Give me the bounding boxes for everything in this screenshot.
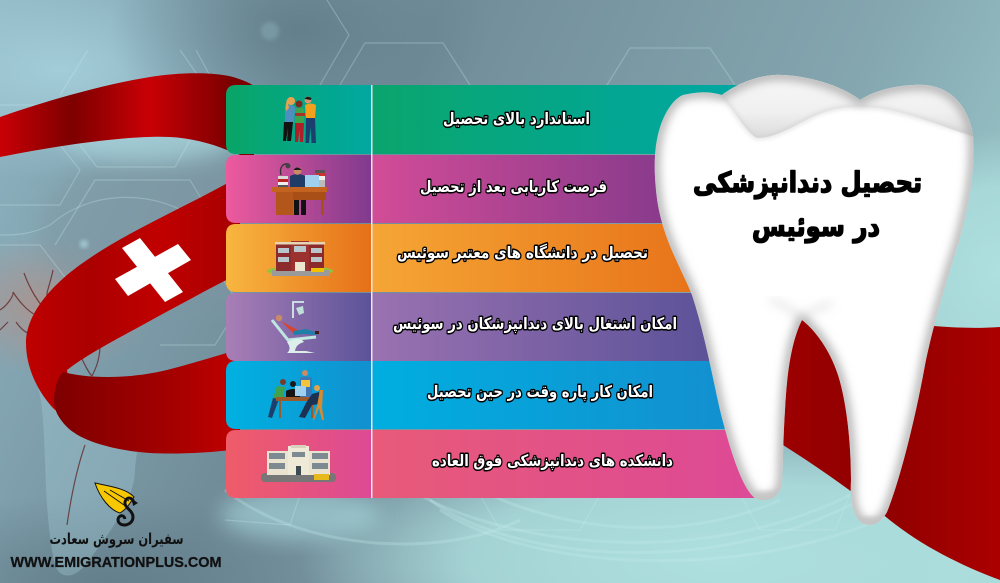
title <box>693 166 922 243</box>
row 5: part-time work while studying <box>226 361 760 429</box>
panel: benefits list <box>226 85 760 498</box>
illustration: tooth <box>654 74 974 525</box>
icon: white school building <box>261 445 336 482</box>
red ribbon band: right side behind tooth <box>760 300 1000 580</box>
logo <box>10 483 222 571</box>
red ribbon band: top left <box>0 73 254 160</box>
icon: person at desk <box>272 164 327 215</box>
row 6 text: دانشکده های دندانپزشکی فوق العاده <box>432 451 673 471</box>
red ribbon band: lower fold <box>54 349 240 454</box>
icon: red brick university <box>267 241 333 276</box>
title: تحصیل دندانپزشکی <box>693 166 922 199</box>
row 4: high employment of dentists <box>226 293 760 361</box>
red ribbon band: sweeping curve <box>26 176 240 410</box>
row 2: job opportunities after study <box>226 155 760 223</box>
row 4 text: امکان اشتغال بالای دندانپزشکان در سوئیس <box>393 314 677 334</box>
company name: سفیران سروش سعادت <box>50 530 184 548</box>
row 1 text: استاندارد بالای تحصیل <box>443 109 590 128</box>
icon: winged swan <box>95 483 138 525</box>
row 1: high education standard <box>226 85 760 154</box>
row 5 text: امکان کار پاره وقت در حین تحصیل <box>427 382 653 402</box>
icon: team at table <box>268 370 324 420</box>
icon: Swiss cross <box>115 238 191 302</box>
row 3: study at reputable Swiss universities <box>226 224 760 292</box>
vertical divider <box>371 85 372 498</box>
row 2 text: فرصت کاریابی بعد از تحصیل <box>420 177 607 196</box>
icon: dental chair <box>272 302 319 353</box>
row 6: excellent dental schools <box>226 430 760 498</box>
icon: three students <box>283 96 316 143</box>
title: در سوئیس <box>752 210 880 243</box>
row 3 text: تحصیل در دانشگاه های معتبر سوئیس <box>397 243 648 262</box>
website address: WWW.EMIGRATIONPLUS.COM <box>10 554 222 571</box>
